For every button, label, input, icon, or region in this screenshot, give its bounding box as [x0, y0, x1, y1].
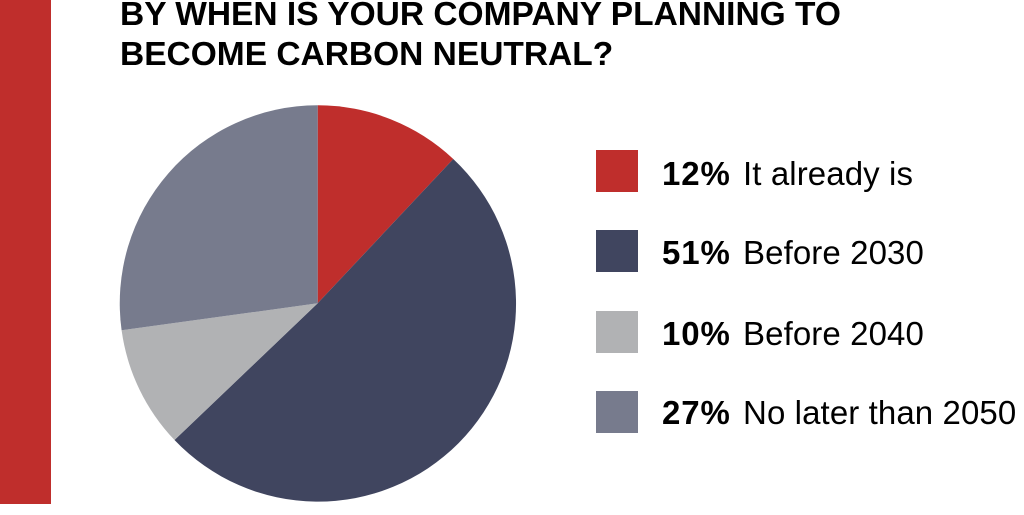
legend item: 12% [596, 150, 913, 192]
legend item: 10%: 10% Before 2040 [662, 315, 924, 352]
title [120, 0, 841, 73]
pie chart [120, 105, 516, 502]
title: BECOME CARBON NEUTRAL? [120, 36, 613, 73]
legend [596, 150, 1016, 433]
legend item: 51%: 51% Before 2030 [662, 234, 924, 271]
legend item: 27%: 27% No later than 2050 [662, 394, 1016, 431]
red side bar [0, 0, 51, 504]
legend item: 12%: 12% It already is [662, 155, 913, 192]
